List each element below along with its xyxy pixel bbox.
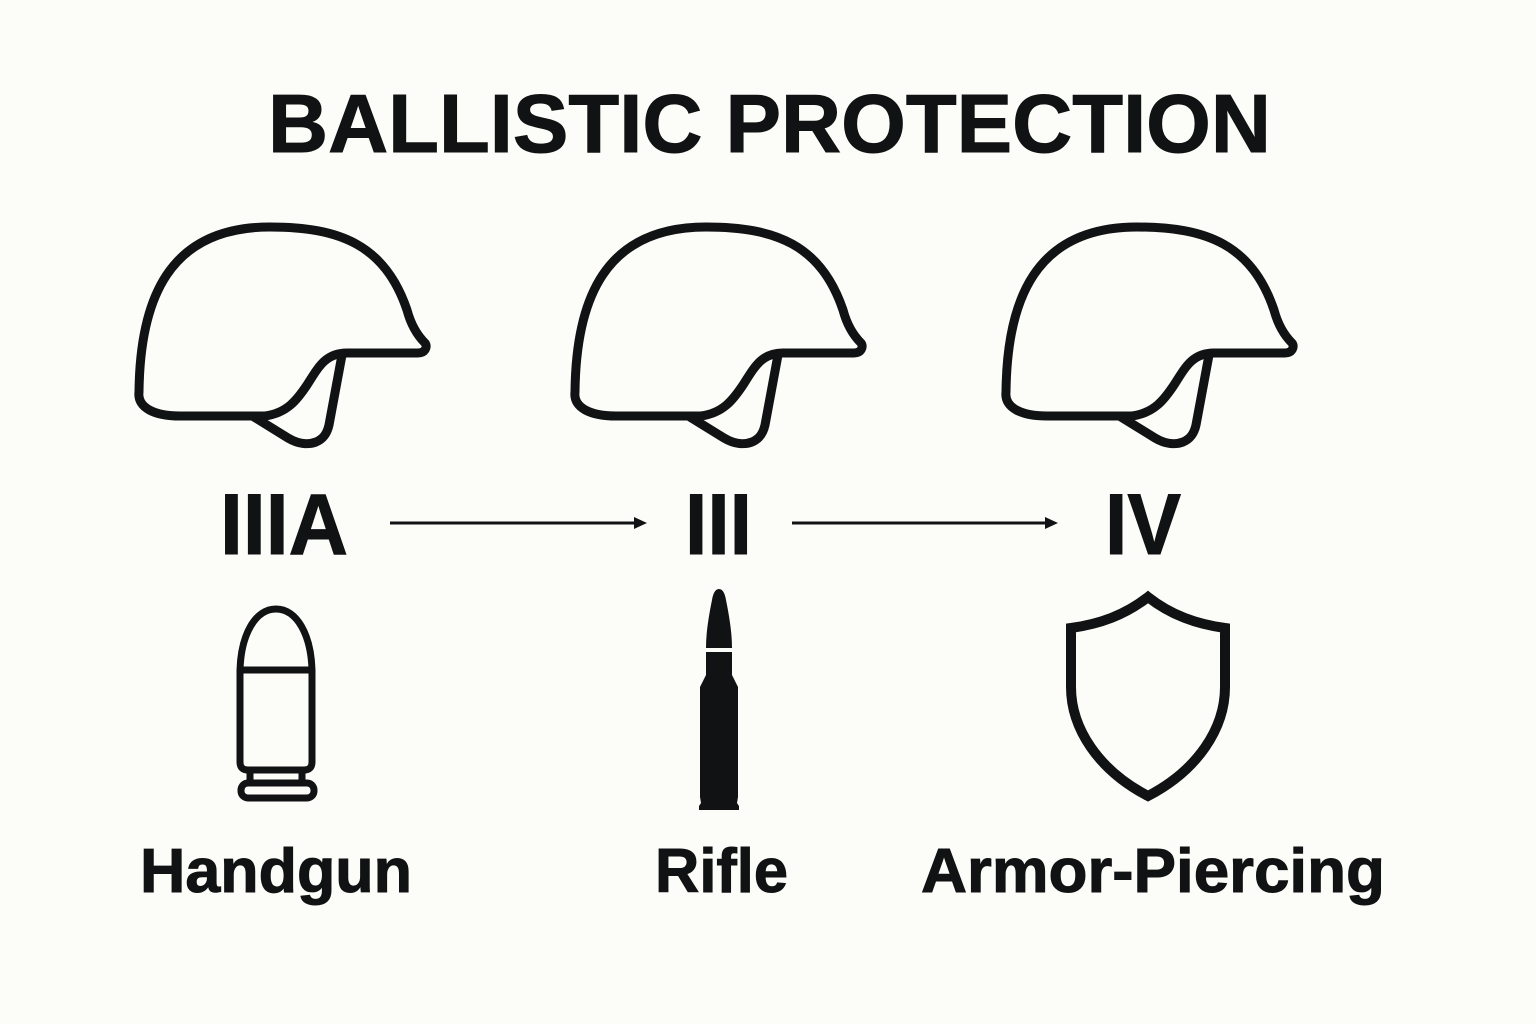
icon: rifle cartridge: [699, 589, 739, 810]
icon: helmet level III: [575, 227, 862, 444]
level label III: III: [685, 477, 752, 573]
icon: helmet level IV: [1006, 227, 1293, 444]
arrow: IIIA to III: [390, 517, 647, 529]
threat label: Rifle: Rifle: [655, 837, 788, 906]
icon: helmet level IIIA: [139, 227, 426, 444]
title: BALLISTIC PROTECTION: [268, 77, 1271, 170]
icon: armor shield: [1071, 597, 1225, 796]
threat label: Handgun: Handgun: [140, 837, 412, 906]
level label IV: IV: [1105, 477, 1181, 573]
icon: handgun bullet: [240, 609, 314, 798]
level label IIIA: IIIA: [220, 477, 348, 573]
arrow: III to IV: [792, 517, 1058, 529]
threat label: Armor-Piercing: Armor-Piercing: [921, 837, 1385, 906]
